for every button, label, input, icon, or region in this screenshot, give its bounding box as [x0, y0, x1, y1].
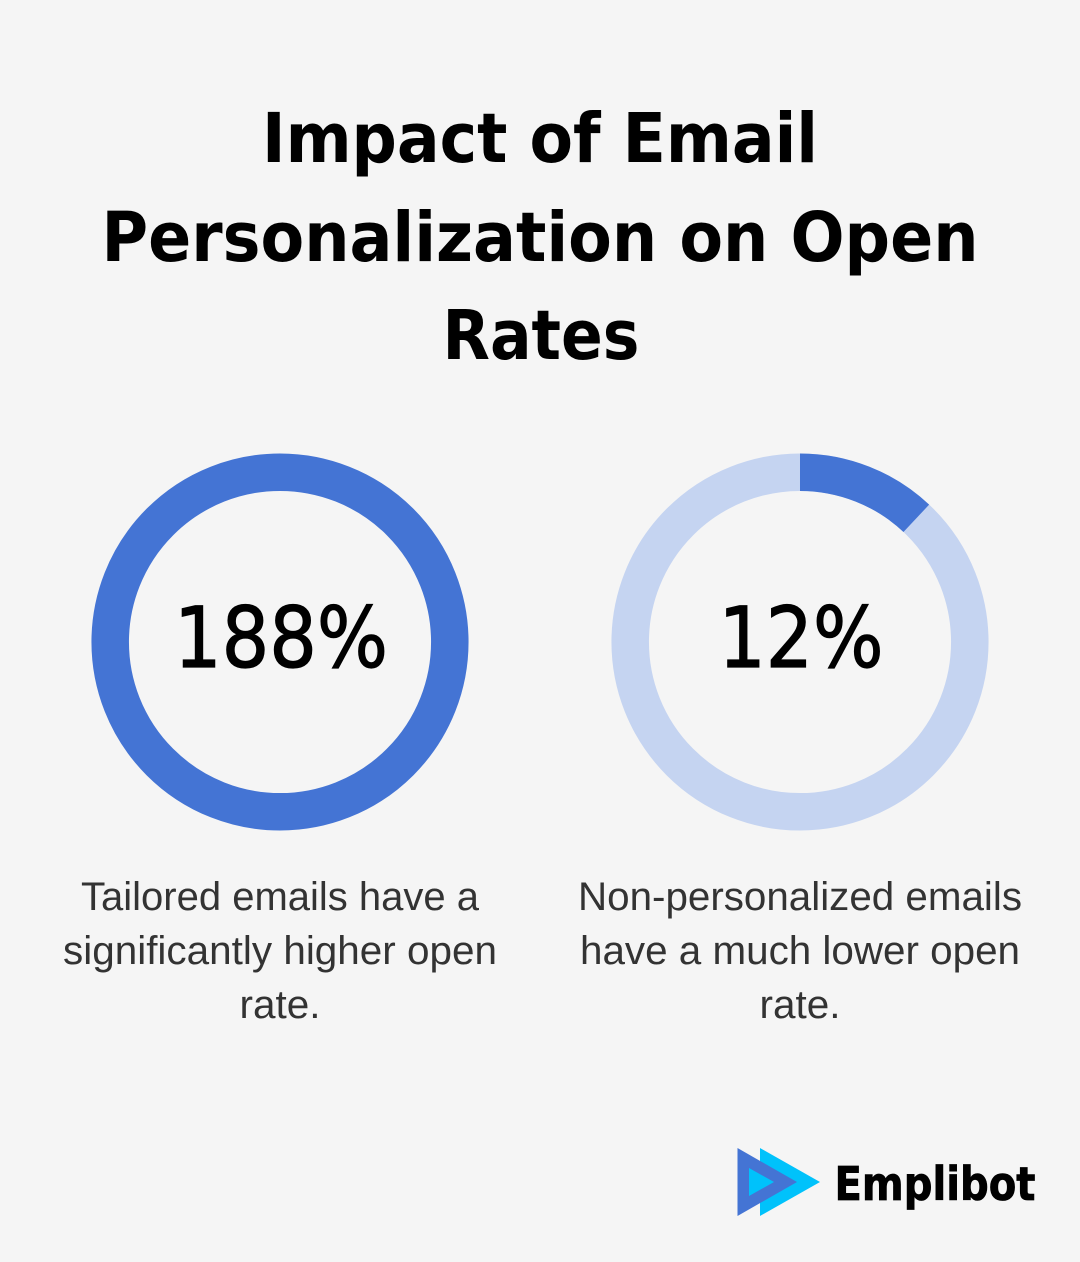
caption: non-personalized emails: Non-personalized emails [578, 875, 1022, 919]
donut: 12% [630, 472, 970, 812]
value: 188%: 188% [174, 589, 388, 687]
caption: tailored emails: rate. [240, 983, 320, 1027]
value: 12%: 12% [718, 589, 884, 687]
wordmark: Emplibot [834, 1157, 1036, 1211]
caption: tailored emails [63, 875, 497, 1027]
title: Rates [442, 296, 640, 376]
caption: tailored emails: significantly higher open [63, 929, 497, 973]
caption: non-personalized emails: have a much lower open [580, 929, 1020, 973]
title: Personalization on Open [102, 198, 978, 278]
logo: Emplibot [738, 1148, 1036, 1216]
title: Impact of Email [262, 99, 818, 179]
caption: non-personalized emails: rate. [760, 983, 840, 1027]
panel: non-personalized emails [578, 472, 1022, 1027]
donut: 188% [110, 472, 450, 812]
caption: tailored emails: Tailored emails have a [81, 875, 480, 919]
caption: non-personalized emails [578, 875, 1022, 1027]
icon: play triangles [738, 1148, 820, 1216]
panel: tailored emails [63, 472, 497, 1027]
title [102, 99, 978, 376]
